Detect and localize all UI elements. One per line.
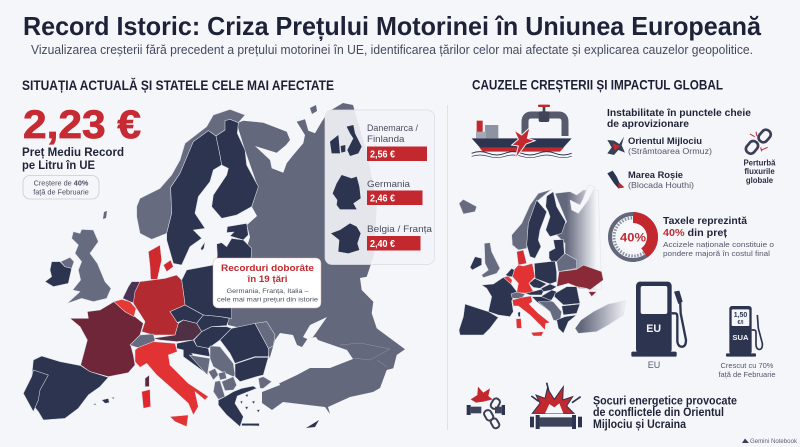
icon: USA fuel pump: 1,50 <box>734 312 747 319</box>
region: Caucasus borders <box>340 343 390 367</box>
left heading: SITUAȚIA ACTUALĂ ȘI STATELE CELE MAI AFECTATE <box>22 78 334 93</box>
right heading: CAUZELE CREȘTERII ȘI IMPACTUL GLOBAL <box>472 78 723 92</box>
region: Belarus <box>557 253 577 272</box>
text: energy shocks: Mijlociu și Ucraina <box>593 419 687 431</box>
row: Denmark and Finland: Danemarca / <box>367 123 418 134</box>
region: Hungary <box>542 290 557 300</box>
region: Aegean islands <box>240 394 260 413</box>
region: Moldova <box>255 322 275 348</box>
icon: Germany silhouette <box>333 175 361 209</box>
icon: pipeline explosion <box>530 383 582 429</box>
region: Albania <box>213 381 225 399</box>
region: Norway <box>137 109 245 239</box>
region: Hungary <box>194 327 232 348</box>
region: Sicily <box>531 332 543 336</box>
icon: EU fuel pump <box>631 282 686 357</box>
watermark: Gemini Notebook <box>750 438 798 445</box>
region: Austria <box>153 320 202 342</box>
region: France <box>482 277 518 317</box>
region: Arctic island <box>310 105 317 114</box>
row: Denmark and Finland <box>330 123 427 161</box>
icon: Denmark and Finland silhouettes <box>330 125 362 156</box>
region: Croatia <box>532 297 553 312</box>
region: Portugal <box>23 370 48 412</box>
heading: supply instability: Instabilitate în punctele cheie <box>607 107 751 119</box>
region: Romania <box>554 287 580 305</box>
icon: 40 percent tax donut: 40% <box>620 232 646 244</box>
title: Record Istoric: Criza Prețului Motorinei în Uniunea Europeană <box>23 11 762 41</box>
region: Crimea <box>588 292 597 297</box>
region: Central Europe and Balkans <box>130 265 275 427</box>
callout: records <box>213 258 321 308</box>
big stat <box>22 103 141 172</box>
region: Bulgaria <box>562 304 580 315</box>
big stat: Preț Mediu Record <box>22 147 124 159</box>
region: Switzerland <box>130 334 155 347</box>
region: Austria <box>525 288 545 295</box>
growth pill: Creștere de 40% <box>34 178 89 188</box>
region: Nordic countries <box>137 109 258 265</box>
text: disrupted flows: globale <box>746 176 774 185</box>
region: Balearic islands <box>93 397 114 405</box>
icon: USA fuel pump <box>726 306 762 357</box>
callout: records: Recorduri doborâte <box>221 263 314 274</box>
text: taxes: Accizele naționale constituie o <box>663 240 774 249</box>
region: Sea of Azov <box>303 317 327 339</box>
region: Bulgaria <box>235 357 268 382</box>
region: Faroe islet <box>103 211 107 219</box>
region: Sardinia <box>516 318 522 328</box>
text: Red Sea: Marea Roșie <box>628 170 683 181</box>
text: disrupted flows <box>743 158 776 185</box>
icon: tanker and broken pipeline <box>472 105 572 159</box>
region: Cyprus <box>306 420 319 428</box>
region: France <box>70 302 143 377</box>
text: USA growth: Crescut cu 70% <box>721 361 774 370</box>
region: Finland <box>212 119 258 218</box>
label: EU: EU <box>648 360 660 370</box>
region: Denmark <box>517 250 527 265</box>
region: Greece <box>218 386 257 427</box>
region: European Turkey <box>258 377 272 388</box>
region: Poland <box>182 265 232 318</box>
region: Iceland <box>459 199 477 214</box>
text: taxes: pondere majoră în costul final <box>663 249 770 258</box>
big stat: pe Litru în UE <box>22 160 95 172</box>
region: Denmark <box>148 245 173 279</box>
country prices panel <box>330 123 433 253</box>
text: energy shocks: Șocuri energetice provocate <box>593 396 737 408</box>
growth pill <box>23 176 99 199</box>
growth pill: față de Februarie <box>33 188 89 196</box>
region: Kosovo <box>218 372 227 380</box>
region: Gotland and Saaremaa <box>201 242 205 251</box>
region: Great Britain <box>67 229 111 303</box>
text: energy shocks <box>593 396 737 431</box>
region: Germany <box>512 263 535 293</box>
icon: Hormuz crossing <box>607 137 625 155</box>
region: Norway <box>512 189 552 250</box>
region: Bosnia <box>189 355 210 375</box>
region: Western Balkans <box>538 302 562 322</box>
region: Belgium <box>503 276 512 284</box>
icon: USA fuel pump: SUA <box>732 333 749 342</box>
region: Serbia <box>210 346 235 377</box>
region: Montenegro <box>208 368 218 380</box>
region: Netherlands <box>506 268 514 277</box>
region: Sweden <box>167 131 222 265</box>
region: Baltics <box>549 239 565 262</box>
text: energy shocks: de conflictele din Orientul <box>593 407 724 419</box>
region: Germany <box>133 275 185 335</box>
subtitle: Vizualizarea creșterii fără precedent a prețului motorinei în UE, identificarea țărilor celor mai afectate și explicarea cauzelor geopolitice. <box>31 42 753 57</box>
row: Denmark and Finland: Finlanda <box>367 134 405 145</box>
text: taxes <box>663 215 774 258</box>
region: fading Russia and eastern mass <box>555 190 602 290</box>
region: Slovenia and Croatia <box>177 340 210 375</box>
text: Middle East <box>628 136 712 156</box>
region: Sardinia <box>142 389 151 408</box>
region: Western Europe <box>23 229 151 420</box>
region: Greece <box>557 315 577 333</box>
region: White Sea <box>570 185 595 213</box>
region: Black Sea <box>267 333 353 383</box>
region: Belgium <box>114 299 136 317</box>
icon: 40 percent tax donut <box>610 212 658 260</box>
row: Germany: 2,46 € <box>370 192 395 204</box>
heading: supply instability <box>607 107 751 130</box>
text: taxes: Taxele reprezintă <box>663 215 747 227</box>
region: Finland <box>546 192 566 237</box>
row: Belgium and France: Belgia / Franța <box>367 224 433 235</box>
callout: records: cele mai mari prețuri din istorie <box>217 296 318 304</box>
region: Ireland <box>45 262 72 287</box>
icon: exploding broken pipe with chain <box>467 387 505 429</box>
region: Northern Ireland <box>61 257 74 268</box>
text: Red Sea <box>628 170 694 190</box>
region: Switzerland <box>511 292 525 298</box>
text: disrupted flows: fluxurile <box>744 167 775 176</box>
text: USA growth: față de Februarie <box>718 370 776 379</box>
text: taxes: 40% din preț <box>663 227 728 239</box>
region: Italy <box>135 342 208 415</box>
region: Czechia <box>170 305 203 323</box>
region: Sweden <box>527 200 547 258</box>
region: Crete <box>242 423 259 426</box>
region: Romania <box>220 323 268 363</box>
big stat: 2,23 € <box>23 103 141 147</box>
region: Sicily <box>170 415 188 427</box>
region: Italy <box>512 296 550 330</box>
pricing panel backdrop <box>325 110 434 264</box>
region: Corsica <box>518 312 520 317</box>
icon: broken chain <box>744 128 773 155</box>
region: Britain <box>482 243 500 278</box>
region: Ireland <box>470 257 482 270</box>
region: Russia, Ukraine, Belarus, Caucasus and Turkey mass <box>228 103 405 414</box>
region: Estonia <box>227 223 248 240</box>
region: Corsica <box>145 375 149 387</box>
heading: supply instability: de aprovizionare <box>607 118 689 130</box>
callout: records: în 19 țări <box>246 274 288 285</box>
region: Turkey <box>575 301 626 333</box>
region: Spain <box>23 356 108 420</box>
map: Europe small <box>459 185 626 336</box>
text: Middle East: (Strâmtoarea Ormuz) <box>628 147 712 156</box>
icon: EU fuel pump: EU <box>646 323 661 335</box>
icon: USA fuel pump: €/l <box>738 320 744 326</box>
region: Netherlands <box>123 282 142 303</box>
row: Belgium and France <box>331 223 433 253</box>
text: disrupted flows: Perturbă <box>743 158 776 168</box>
text: USA growth <box>718 361 776 379</box>
text: Middle East: Orientul Mijlociu <box>628 136 702 147</box>
icon: France silhouette <box>331 223 361 253</box>
region: Slovakia <box>197 315 229 332</box>
row: Belgium and France: 2,40 € <box>370 238 395 250</box>
region: Slovakia <box>541 284 557 292</box>
region: Latvia and Lithuania <box>216 238 252 265</box>
row: Germany <box>333 175 422 209</box>
region: Poland <box>534 261 557 284</box>
callout: records: Germania, Franța, Italia – <box>226 288 309 295</box>
map: Europe main <box>23 103 405 428</box>
text: Red Sea: (Blocada Houthi) <box>628 181 694 190</box>
row: Germany: Germania <box>367 179 411 190</box>
icon: Red Sea <box>607 171 624 188</box>
region: North Macedonia <box>222 377 237 391</box>
row: Denmark and Finland: 2,56 € <box>370 148 395 160</box>
region: Iberia <box>459 304 498 335</box>
region: Ukraine <box>557 265 603 290</box>
region: Czechia <box>529 278 547 288</box>
